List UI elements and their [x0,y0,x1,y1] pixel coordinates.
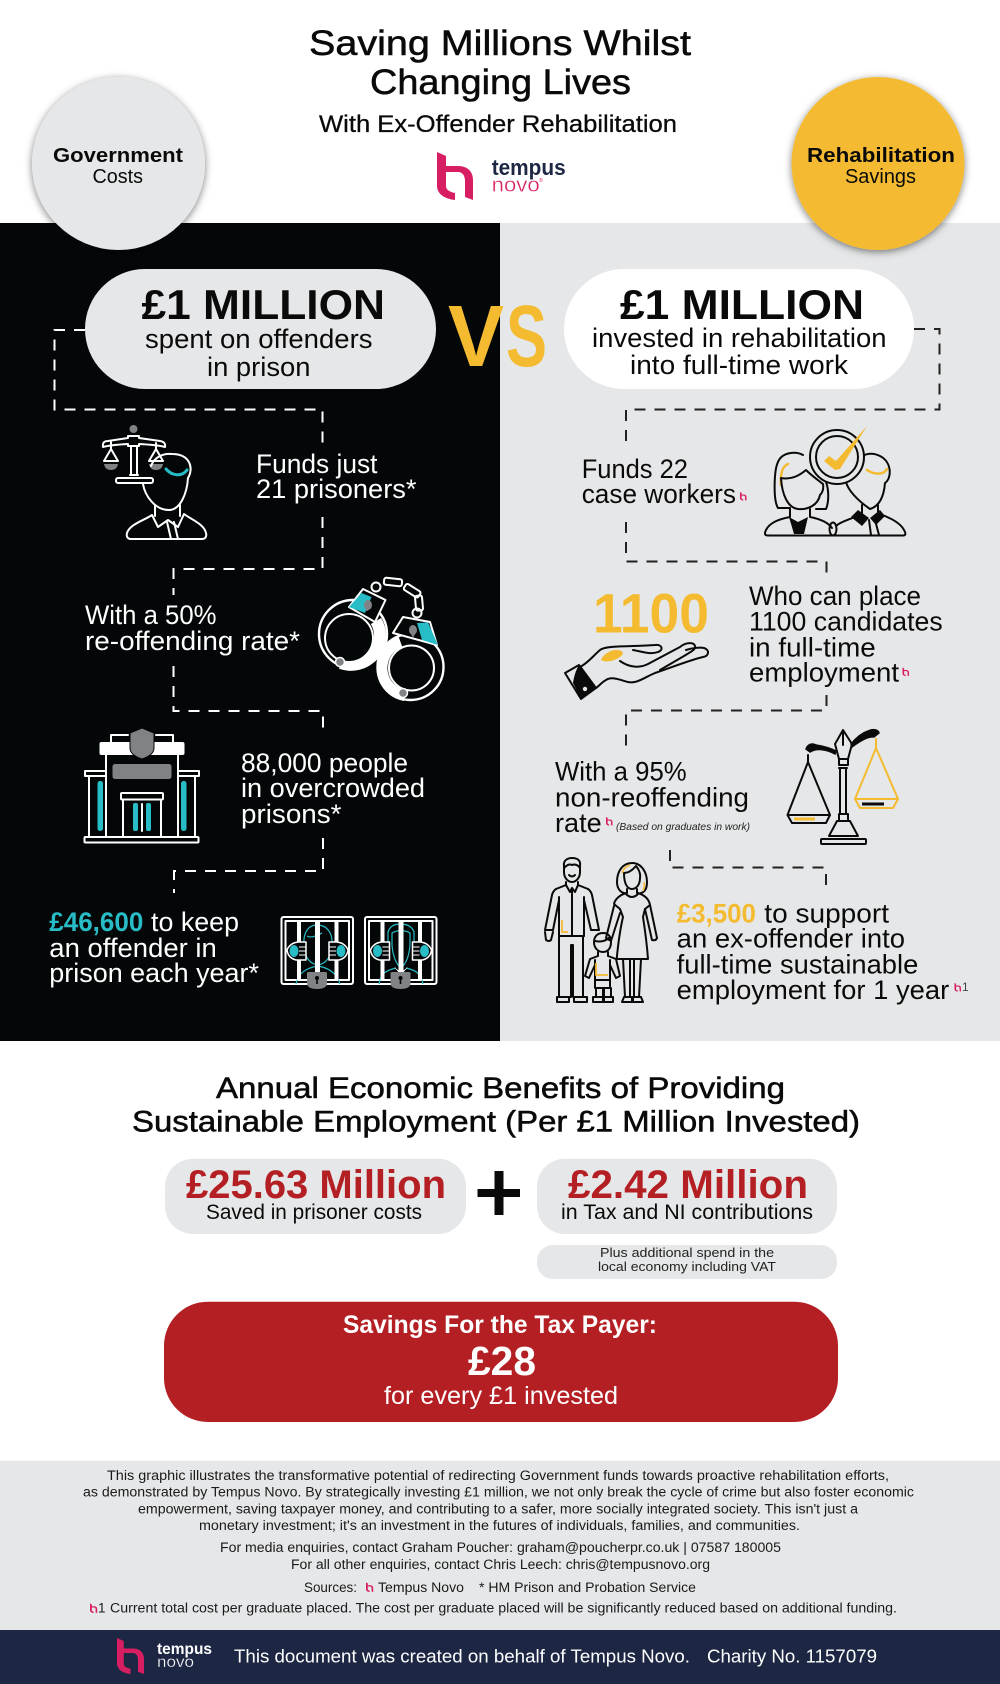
heading: Sustainable Employment (Per £1 Million Invested) [132,1106,860,1139]
text: contact details: For all other enquiries, contact Chris Leech: chris@tempusnovo.org [291,1557,710,1572]
pill: £1 million spent [85,269,436,389]
icon: two case workers with check [765,426,905,536]
pill: £1 million spent: in prison [207,352,310,382]
icon: plus sign [478,1171,520,1215]
callout: savings for the tax payer: Savings For the Tax Payer: [343,1311,657,1339]
text: cost per offender: an offender in [49,933,217,963]
text: footnote: Current total cost per graduate placed. The cost per graduate placed will be significantly reduced based on additional funding. [110,1601,897,1616]
callout: savings for the tax payer: £28 [468,1338,536,1384]
connector: dashed path [626,329,940,886]
VS label [448,288,547,385]
title [309,24,691,102]
text: 50% re-offending [85,600,300,656]
text: contact details [220,1540,781,1572]
icon: open hand [565,643,708,699]
text: sources: Tempus Novo [378,1580,464,1595]
icon: prisoner behind bars 2 [365,917,436,989]
text: summary paragraph: as demonstrated by Tempus Novo. By strategically investing £1 million, we not only break the cycle of crime but also foster economic [83,1485,914,1500]
text: 88,000 people [241,748,425,829]
VS label: V [448,288,504,385]
stat: 1100: 1100 [593,582,709,645]
pill: tax and NI contributions [537,1159,837,1234]
pill: saved in prisoner costs: Saved in prisoner costs [206,1201,422,1224]
pill: saved in prisoner costs: £25.63 Million [186,1163,446,1207]
pill: additional spend note: Plus additional spend in the [600,1245,774,1260]
text: cost to support: an ex-offender into [677,924,905,954]
title: Saving Millions Whilst [309,24,691,63]
subtitle: With Ex-Offender Rehabilitation [319,111,677,138]
text: funds just 21 prisoners [256,449,416,504]
text: sources [304,1580,696,1595]
circle: government costs [32,77,205,250]
text: funds 22 case workers: Funds 22 [582,454,688,484]
text: 88,000 people: 88,000 people [241,748,408,778]
callout: savings for the tax payer [164,1302,838,1422]
text: funds just 21 prisoners: 21 prisoners* [256,474,416,504]
heading [132,1072,860,1139]
text: summary paragraph [83,1468,914,1533]
pill: £1 million invested: invested in rehabilitation [592,323,886,353]
text: 95% non-reoffending [555,757,750,838]
icon: balance scales [788,730,898,844]
logo: tempus novo white: tempus [157,1641,212,1658]
pill: tax and NI contributions: in Tax and NI contributions [561,1201,813,1224]
text: footnote: 1 [98,1601,106,1616]
section: annual economic benefits [132,1072,860,1422]
circle: rehabilitation savings: Rehabilitation [807,144,955,167]
text: who can place 1100 candidates: in full-time [749,633,876,663]
icon: judge with scales [103,425,206,539]
pill: saved in prisoner costs [165,1159,466,1234]
circle: government costs: Government [53,144,183,167]
VS label: S [506,288,547,385]
pill: tax and NI contributions: £2.42 Million [568,1163,808,1207]
connector: dashed path [54,330,323,893]
circle: government costs: Costs [92,166,143,188]
text: 50% re-offending: re-offending rate* [85,626,300,656]
text: 95% non-reoffending: non-reoffending [555,783,749,813]
heading: Annual Economic Benefits of Providing [216,1072,785,1105]
pill: £1 million invested: £1 MILLION [620,281,864,328]
icon: family [545,858,657,1002]
icon: handcuffs [319,578,444,700]
callout: savings for the tax payer: for every £1 invested [384,1382,618,1410]
text: summary paragraph: This graphic illustrates the transformative potential of redirecting Government funds towards proactive rehabilitation efforts, [107,1468,889,1483]
pill: additional spend note [537,1245,837,1279]
text: summary paragraph: monetary investment; it's an investment in the futures of individuals, families, and communities. [199,1518,800,1533]
text: cost per offender: £46,600 [49,907,143,937]
text: who can place 1100 candidates: employment [749,658,900,688]
text: cost to support: to support [764,898,890,928]
text: cost to support: employment for 1 year [677,975,949,1005]
text: cost per offender: prison each year* [49,958,259,988]
text: funds 22 case workers: case workers [582,479,736,509]
text: funds 22 case workers [582,454,746,509]
text: who can place 1100 candidates [749,581,943,688]
text: cost per offender [49,907,259,988]
pill: £1 million spent: spent on offenders [145,324,372,354]
logo: tempus novo: tempus [492,155,566,180]
text: cost to support: 1 [962,980,969,994]
icon: prisoner behind bars 1 [282,917,353,989]
title: Changing Lives [370,63,631,102]
pill: £1 million invested: into full-time work [630,350,849,380]
pill: £1 million invested [564,269,914,389]
text: funds just 21 prisoners: Funds just [256,449,378,479]
text: 95% non-reoffending: rate [555,808,602,838]
icon: prison building [84,728,199,842]
text: 50% re-offending: With a 50% [85,600,216,630]
header: title and logo [309,24,691,200]
text: charity statement: Charity No. 1157079 [707,1646,877,1667]
text: charity statement: This document was created on behalf of Tempus Novo. [234,1646,690,1667]
logo: tempus novo [437,152,566,200]
circle: rehabilitation savings: Savings [845,166,916,188]
text: summary paragraph: empowerment, saving taxpayer money, and contributing to a safer, more socially integrated society. This isn't just a [138,1502,859,1517]
text: cost to support [677,898,969,1005]
logo: tempus novo: novo [492,174,540,197]
text: 88,000 people: in overcrowded [241,773,425,803]
logo: tempus novo white: novo [157,1654,194,1671]
panel: rehabilitation savings [500,223,1000,1041]
text: 95% non-reoffending: With a 95% [555,757,687,787]
text: 95% non-reoffending: (Based on graduates in work) [616,821,750,833]
text: who can place 1100 candidates: 1100 candidates [749,607,943,637]
text: contact details: For media enquiries, contact Graham Poucher: graham@poucherpr.co.uk | 07587 180005 [220,1540,781,1555]
text: sources: * HM Prison and Probation Service [479,1580,696,1595]
footer: notes and sources [0,1461,1000,1630]
pill: additional spend note: local economy including VAT [598,1259,776,1274]
text: sources: Sources: [304,1580,357,1595]
text: who can place 1100 candidates: Who can place [749,581,921,611]
panel: government costs [0,223,500,1041]
logo: tempus novo: ® [539,177,543,184]
text: cost to support: full-time sustainable [677,949,918,979]
footer bar [0,1630,1000,1684]
circle: rehabilitation savings [792,77,964,250]
text: cost per offender: to keep [151,907,239,937]
text: cost to support: £3,500 [677,898,756,928]
logo: tempus novo white [117,1638,212,1674]
text: 88,000 people: prisons* [241,799,342,829]
pill: £1 million spent: £1 MILLION [142,281,385,328]
